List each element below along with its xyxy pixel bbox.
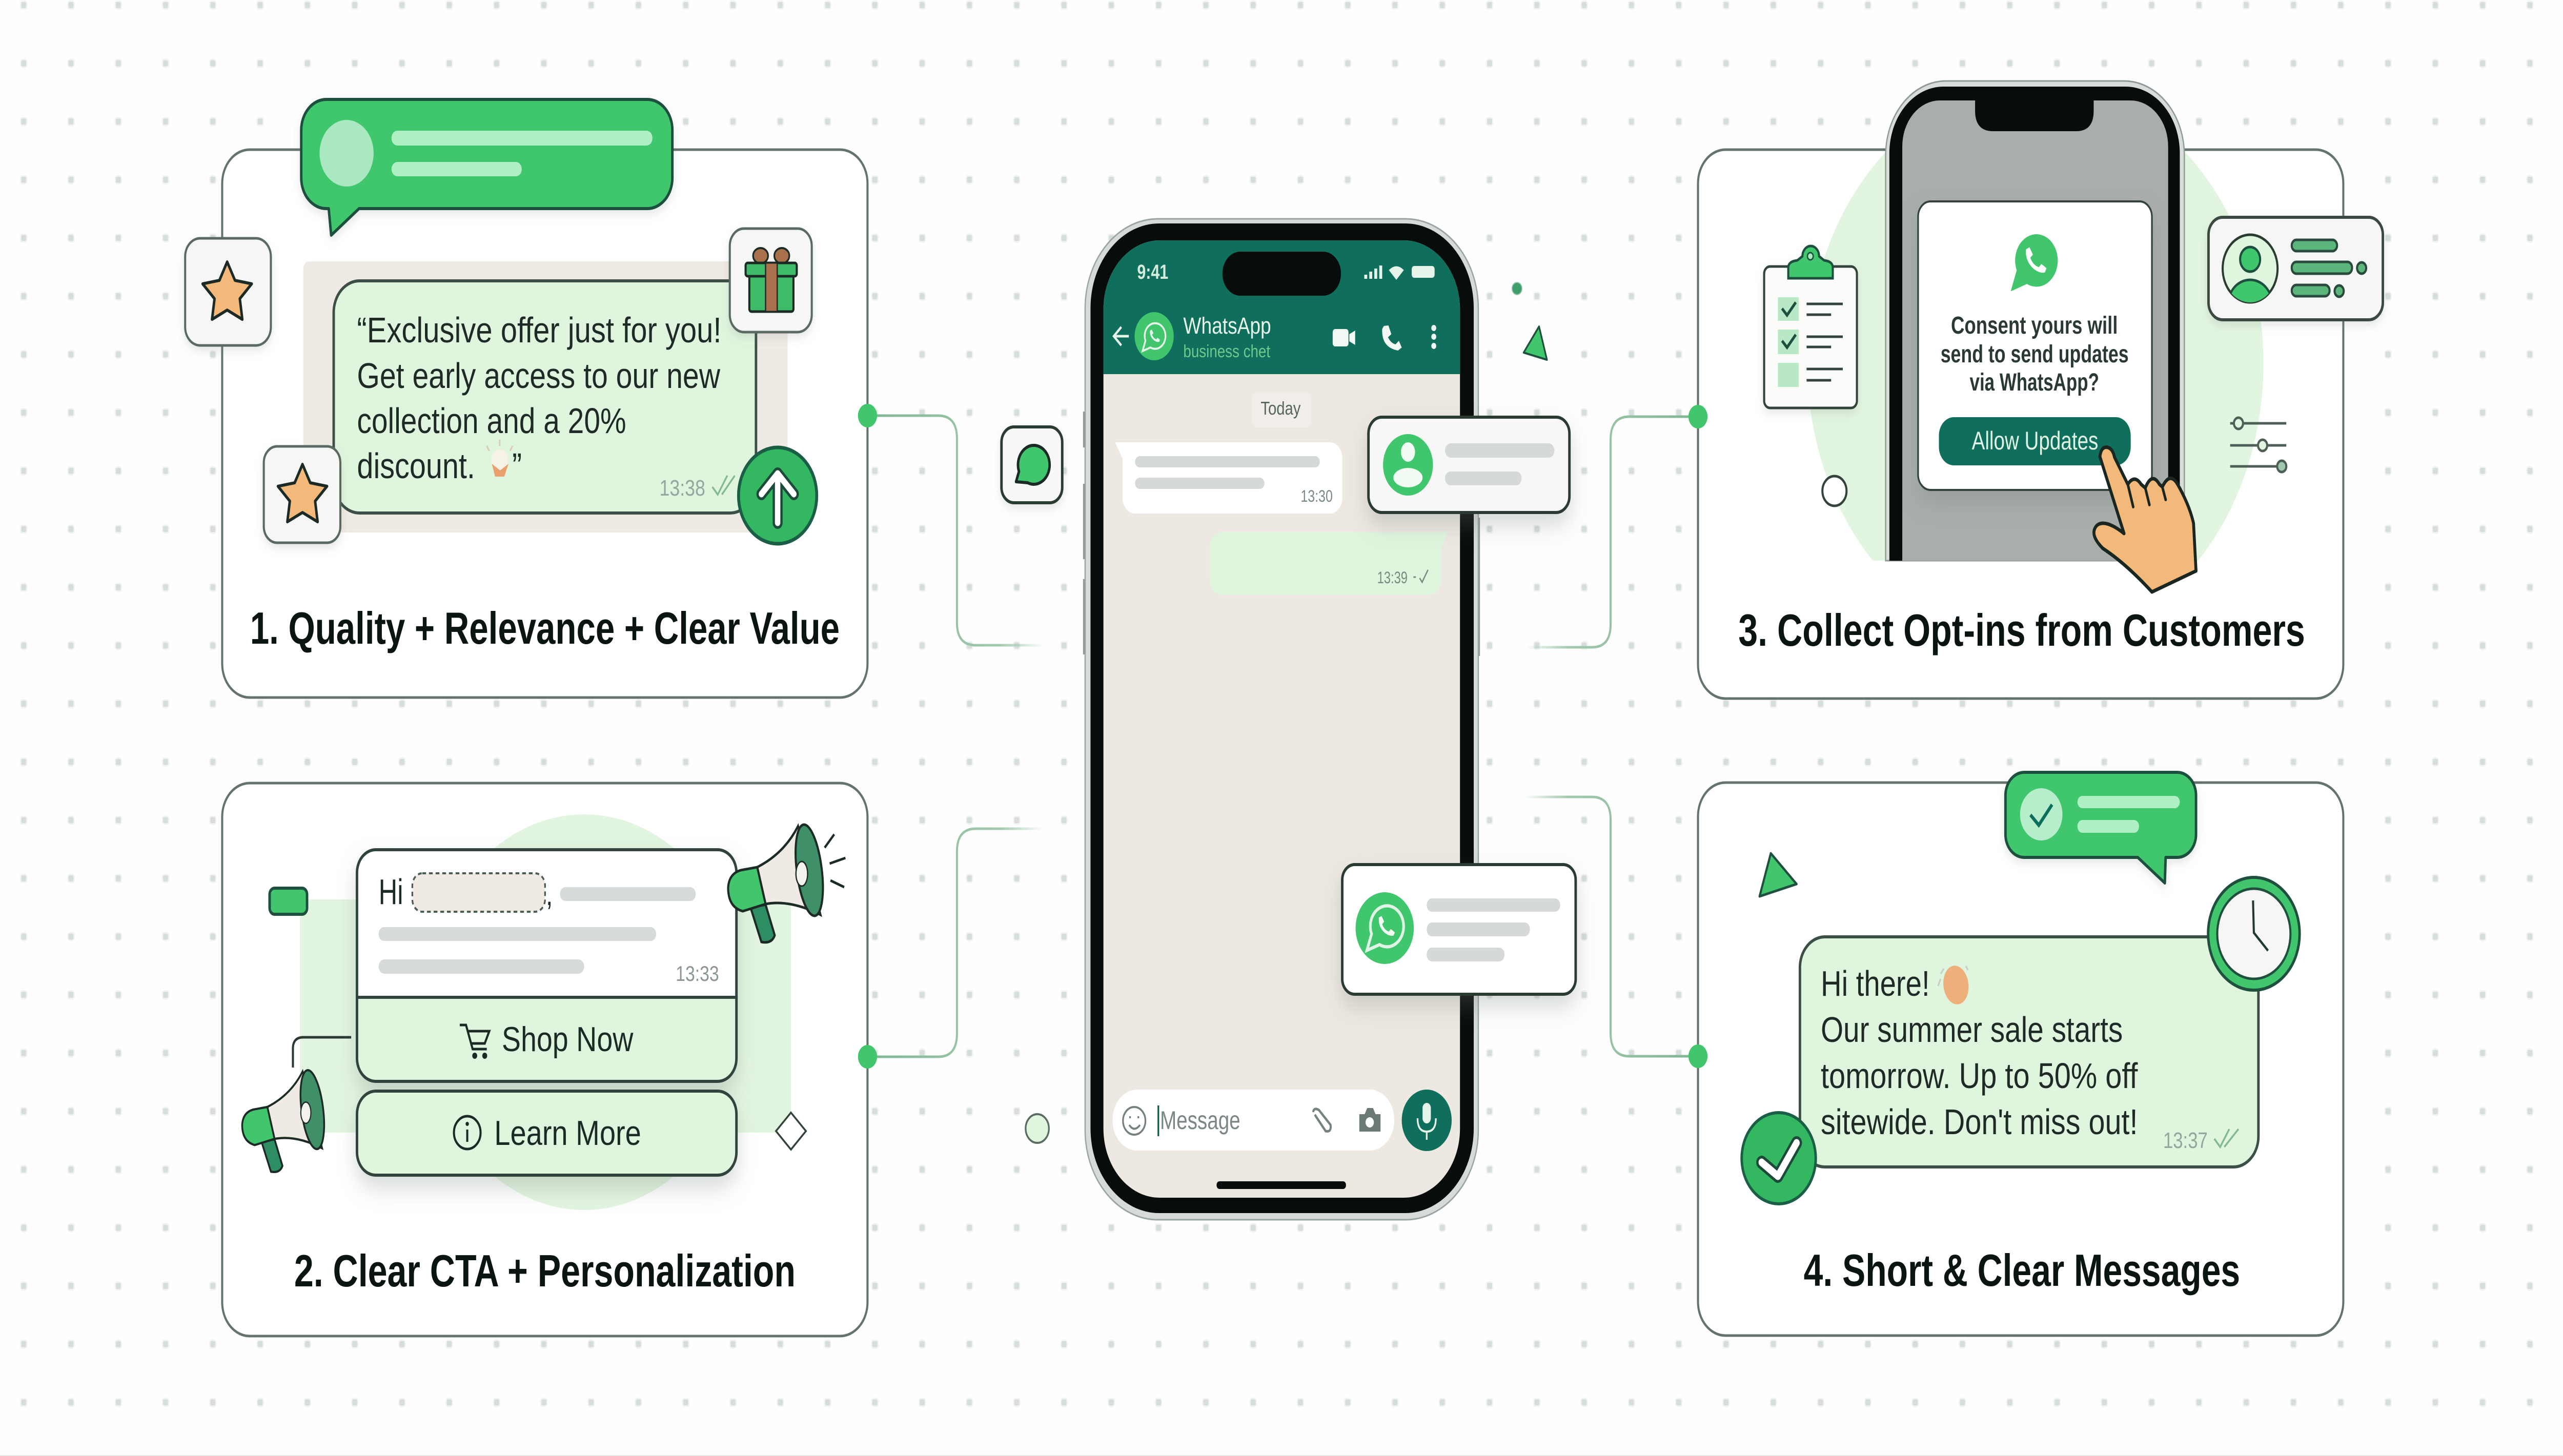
message text: Hi there! <box>1821 963 1930 1003</box>
incoming bubble <box>1115 442 1342 514</box>
button: learn more <box>357 1091 737 1175</box>
message text: sitewide. Don't miss out! <box>1821 1101 2138 1142</box>
card frame <box>222 150 867 698</box>
buttons and message card <box>357 850 737 1175</box>
consent text: Consent yours will <box>1951 312 2118 339</box>
floating notification card <box>1342 865 1576 994</box>
connector: card 4 to phone <box>1523 797 1698 1056</box>
phone bezel <box>1090 223 1474 1213</box>
central phone <box>1083 219 1480 1220</box>
connector node <box>858 404 877 427</box>
back arrow <box>1114 327 1129 345</box>
emoji: waving hand <box>1938 963 1971 1007</box>
timestamp: 13:37 <box>2163 1129 2208 1153</box>
message card <box>357 850 737 997</box>
message text: discount. <box>357 445 475 486</box>
panel: 1 quality relevance value <box>185 99 877 698</box>
dynamic island <box>1223 252 1341 296</box>
connector: card 2 to phone <box>867 829 1044 1057</box>
panel: 3 collect opt-ins <box>1689 81 2383 699</box>
outgoing bubble <box>1210 532 1448 595</box>
emoji icon <box>1123 1107 1146 1135</box>
read ticks <box>713 476 735 495</box>
date pill: Today <box>1260 398 1301 419</box>
contact name: WhatsApp <box>1183 313 1271 339</box>
icon: pointing hand <box>2094 447 2196 592</box>
icon: triangle <box>1760 853 1797 896</box>
chat wallpaper <box>303 261 788 532</box>
icon: chat bubble tile <box>1002 427 1062 503</box>
paperclip icon <box>1313 1109 1331 1132</box>
allow button <box>1939 417 2131 465</box>
message text: tomorrow. Up to 50% off <box>1821 1055 2138 1096</box>
button: shop now: Shop Now <box>502 1020 634 1059</box>
message text: collection and a 20% <box>357 400 626 441</box>
message text: “Exclusive offer just for you! <box>357 310 721 350</box>
timestamp: 13:38 <box>660 476 705 501</box>
connector: card 1 to phone <box>867 416 1044 645</box>
icon: up arrow <box>739 447 817 544</box>
icon: star bottom <box>264 446 340 543</box>
button: shop now <box>357 997 737 1081</box>
mic button <box>1402 1090 1452 1151</box>
read ticks <box>2214 1129 2239 1147</box>
decoration: green triangle <box>1523 326 1547 360</box>
text placeholders <box>379 887 696 974</box>
heading: 1. Quality + Relevance + Clear Value <box>250 603 840 653</box>
icon: check circle <box>1742 1113 1816 1204</box>
icon: gift <box>730 229 812 332</box>
incoming bubble: 13:30 <box>1300 488 1333 506</box>
message text: Our summer sale starts <box>1821 1009 2123 1050</box>
cursor <box>1157 1105 1159 1136</box>
heading: 3. Collect Opt-ins from Customers <box>1738 605 2305 655</box>
floating contact card <box>1369 417 1570 512</box>
background blob <box>1811 152 2264 561</box>
home indicator <box>1216 1181 1346 1189</box>
panel: 2 clear CTA and personalization <box>222 783 877 1336</box>
message text <box>1821 963 2138 1142</box>
icon: clipboard checklist <box>1764 246 1857 408</box>
outgoing bubble: 13:39 <box>1377 569 1408 587</box>
greeting: Hi <box>379 871 403 912</box>
camera icon <box>1359 1108 1380 1132</box>
consent text: via WhatsApp? <box>1970 368 2099 396</box>
status icons <box>1365 265 1435 280</box>
whatsapp header <box>1104 240 1460 374</box>
message input bar <box>1112 1090 1394 1151</box>
contact subtitle: business chet <box>1183 341 1270 361</box>
consent text <box>1941 312 2129 396</box>
icon: star left <box>185 238 271 345</box>
connector node <box>858 1045 877 1069</box>
phone mockup <box>1886 81 2184 561</box>
comma: , <box>546 877 553 912</box>
phone screen <box>1104 240 1460 1198</box>
icon: green chat bubble <box>301 99 673 235</box>
icon: small green tag <box>270 888 307 914</box>
whatsapp logo <box>2011 234 2058 291</box>
background blob <box>300 814 791 1210</box>
icon: clock <box>2208 877 2300 990</box>
heading: 4. Short & Clear Messages <box>1804 1245 2240 1296</box>
consent text: send to send updates <box>1941 340 2129 368</box>
card frame <box>1698 150 2343 699</box>
icon: green bubble with check <box>2005 772 2196 883</box>
decoration: green dot <box>1512 282 1522 295</box>
allow button: Allow Updates <box>1972 426 2098 455</box>
icon: megaphone bottom left <box>242 1068 328 1172</box>
consent dialog <box>1918 201 2152 490</box>
status time: 9:41 <box>1137 260 1168 283</box>
card frame <box>222 783 867 1336</box>
name placeholder <box>412 873 545 912</box>
panel: 4 short and clear messages <box>1689 772 2343 1336</box>
decoration: mint circle <box>1026 1114 1049 1143</box>
message bubble <box>334 281 756 513</box>
date pill <box>1252 392 1311 427</box>
message bubble <box>1800 937 2259 1167</box>
connector: card 3 to phone <box>1525 417 1698 647</box>
icon: diamond <box>776 1113 806 1150</box>
card frame <box>1698 783 2343 1336</box>
phone frame <box>1085 219 1478 1220</box>
call icons <box>1333 325 1436 351</box>
placeholder: Message <box>1160 1106 1240 1135</box>
message text: Get early access to our new <box>357 355 721 396</box>
timestamp: 13:33 <box>676 962 719 986</box>
icon: contact card <box>2208 217 2383 327</box>
megaphone connector <box>293 1037 351 1068</box>
emoji: party burst <box>487 440 513 477</box>
phone side buttons <box>1083 412 1480 656</box>
connector node <box>1689 405 1707 428</box>
icon: sliders <box>2230 418 2286 472</box>
avatar logo <box>1134 312 1174 360</box>
connector node <box>1689 1044 1707 1068</box>
message text: ” <box>512 445 522 486</box>
message text <box>357 310 721 486</box>
icon: megaphone top right <box>728 822 845 942</box>
icon: small circle <box>1822 476 1846 506</box>
heading: 2. Clear CTA + Personalization <box>294 1245 796 1296</box>
button: learn more: Learn More <box>494 1114 641 1153</box>
